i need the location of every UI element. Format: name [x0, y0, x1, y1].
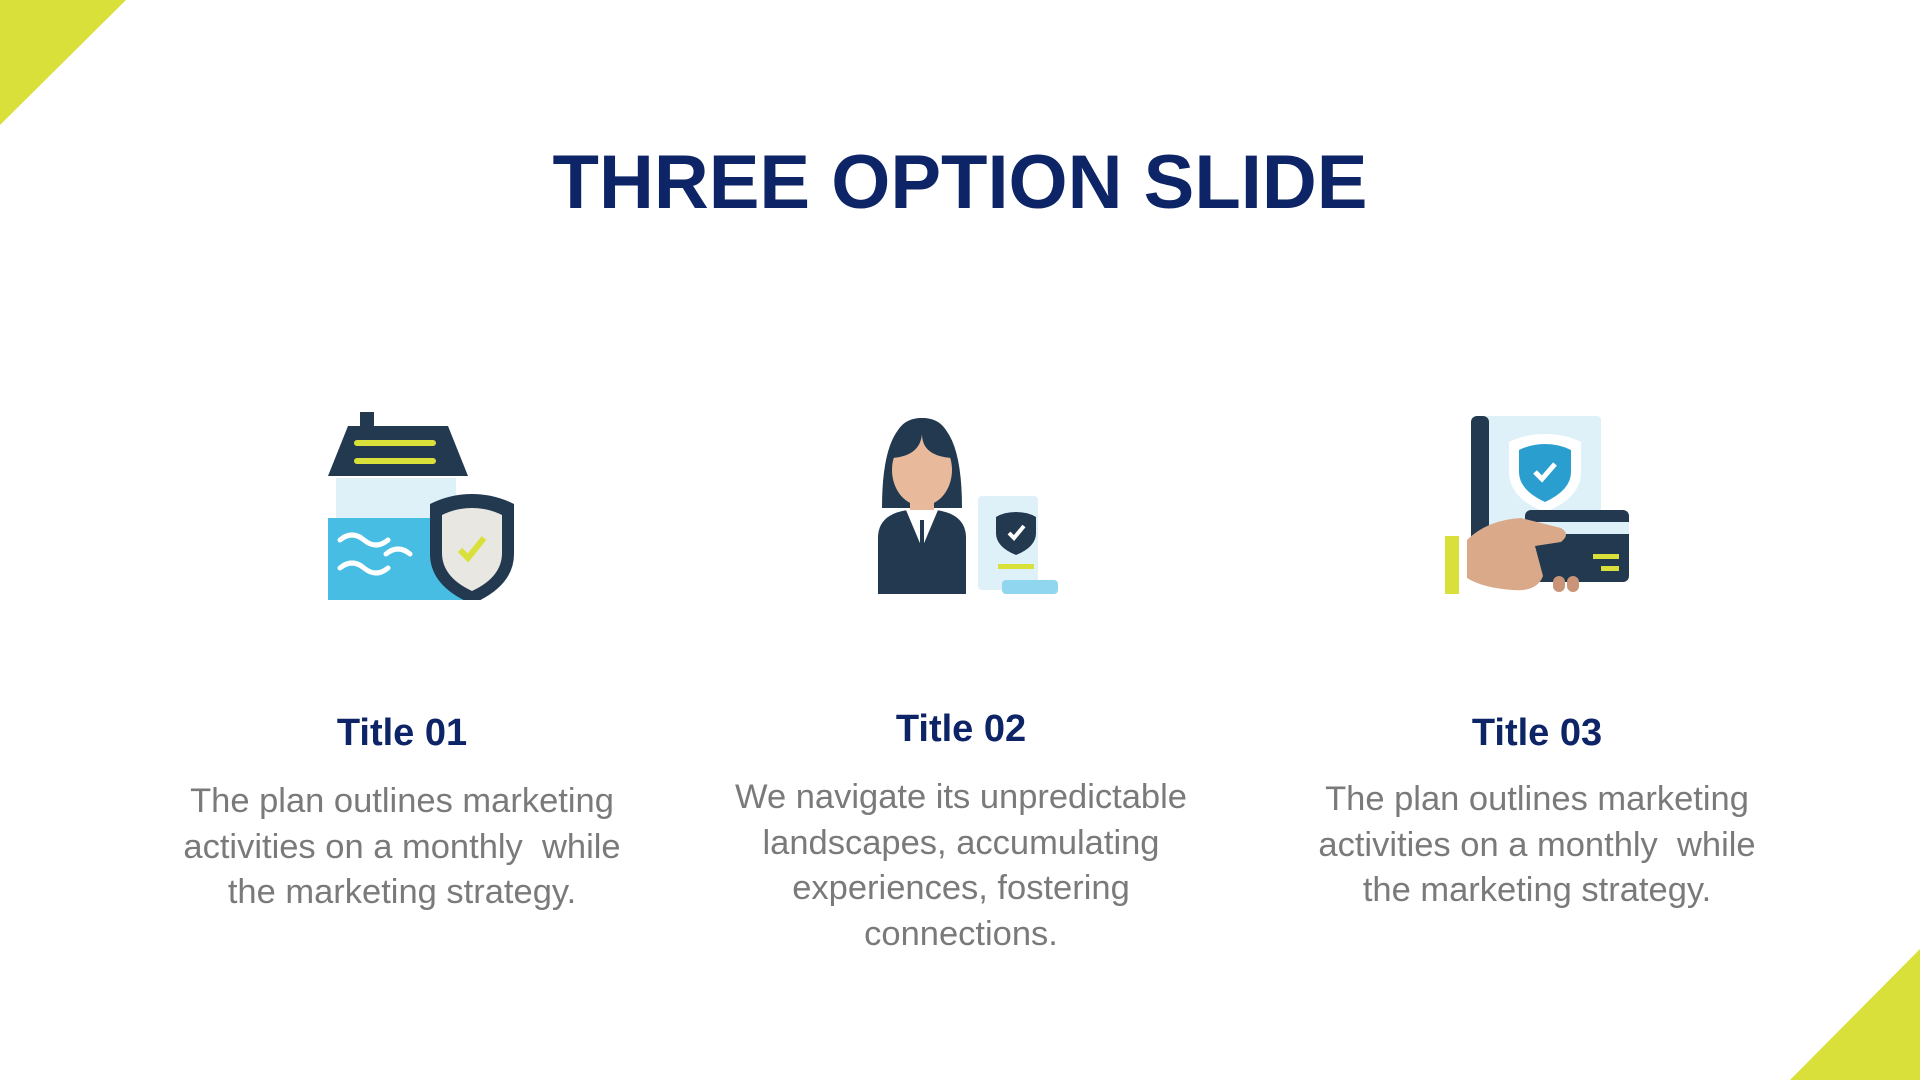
title: THREE OPTION SLIDE	[553, 140, 1367, 225]
text block 1: The plan outlines marketing	[190, 782, 614, 820]
text block 2	[735, 778, 1187, 952]
text block 2: experiences, fostering	[792, 869, 1130, 907]
text block 1: the marketing strategy.	[228, 873, 576, 911]
text block 2: connections.	[864, 914, 1058, 952]
text block 3: The plan outlines marketing	[1325, 780, 1749, 818]
heading: Title 02: Title 02	[896, 708, 1026, 750]
text block 3: the marketing strategy.	[1363, 871, 1711, 909]
option 1	[183, 712, 621, 911]
icon: agent with document	[878, 418, 1058, 594]
icon: hand with card and policy	[1445, 416, 1629, 594]
corner triangle bottom-right	[1790, 949, 1920, 1080]
heading: Title 03: Title 03	[1472, 712, 1602, 754]
text block 3: activities on a monthly while	[1318, 826, 1756, 864]
option 3	[1318, 712, 1756, 909]
heading: Title 01: Title 01	[337, 712, 467, 754]
text block 2: landscapes, accumulating	[762, 824, 1160, 862]
icon: house with water and shield	[328, 412, 514, 600]
text block 2: We navigate its unpredictable	[735, 778, 1187, 816]
text block 1	[183, 782, 621, 911]
option 2	[735, 708, 1187, 952]
corner triangle top-left	[0, 0, 126, 125]
text block 1: activities on a monthly while	[183, 828, 621, 866]
text block 3	[1318, 780, 1756, 909]
